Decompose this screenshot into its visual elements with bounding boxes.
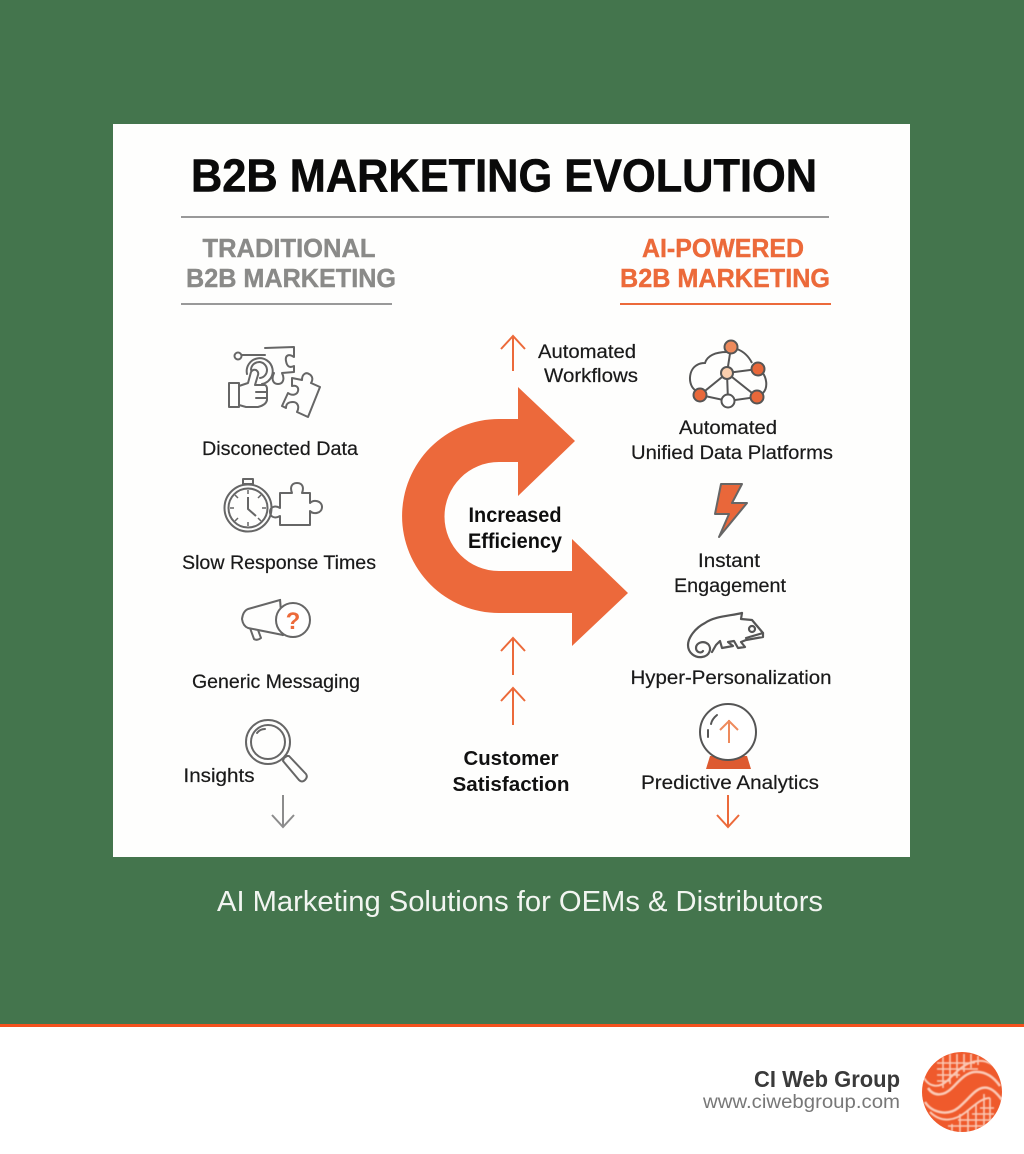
title: B2B MARKETING EVOLUTION [191,150,817,202]
arrow: down grey [272,795,294,827]
label: automated workflows [538,342,638,387]
label: predictive analytics: Predictive Analytics [641,773,819,794]
arrow: down orange [717,795,739,827]
label: increased efficiency [468,504,562,553]
icon: cloud network [690,340,766,408]
label: increased efficiency: Efficiency [468,530,562,553]
icon: magnifying glass [246,720,307,782]
label: increased efficiency: Increased [468,504,562,527]
label: customer satisfaction [452,748,570,796]
icon: stopwatch and puzzle piece [224,479,322,532]
footer: website: www.ciwebgroup.com [702,1092,900,1113]
label: insights: Insights [184,766,254,787]
label: hyper-personalization: Hyper-Personalization [630,668,832,689]
heading: traditional [181,233,396,305]
icon: CI Web Group logo [922,1052,1002,1134]
label: slow response times: Slow Response Times [182,553,376,574]
heading: AI-powered [620,233,831,305]
label: instant engagement [674,551,787,597]
label: disconnected data: Disconected Data [202,439,358,460]
label: instant engagement: Engagement [674,576,787,597]
icon: megaphone with question mark [242,599,310,640]
icon: chameleon [688,613,763,657]
icon: hand and puzzle pieces [229,347,320,417]
label: automated unified data platforms [631,418,833,464]
arrows: up pair [501,638,525,725]
panel: infographic card [113,124,910,857]
label: instant engagement: Instant [698,551,761,572]
icon: lightning bolt [715,484,747,537]
caption: AI Marketing Solutions for OEMs & Distributors [217,886,823,918]
arrow: up automated workflows [501,336,525,371]
footer rule [0,1024,1024,1027]
label: customer satisfaction: Customer [464,748,559,770]
icon: crystal ball [700,704,756,769]
heading: AI-powered: B2B MARKETING [620,263,830,293]
heading: traditional: TRADITIONAL [202,233,376,263]
label: automated workflows: Workflows [544,366,638,387]
label: customer satisfaction: Satisfaction [452,774,570,796]
arrow: large orange U-turn [402,387,628,646]
label: automated unified data platforms: Automated [679,418,777,439]
label: automated unified data platforms: Unified Data Platforms [631,443,833,464]
heading: AI-powered: AI-POWERED [642,233,804,263]
icon: megaphone with question mark: ? [286,608,300,635]
label: automated workflows: Automated [538,342,636,363]
heading: traditional: B2B MARKETING [186,263,396,293]
label: generic messaging: Generic Messaging [192,672,360,693]
footer: brand name: CI Web Group [754,1066,900,1092]
